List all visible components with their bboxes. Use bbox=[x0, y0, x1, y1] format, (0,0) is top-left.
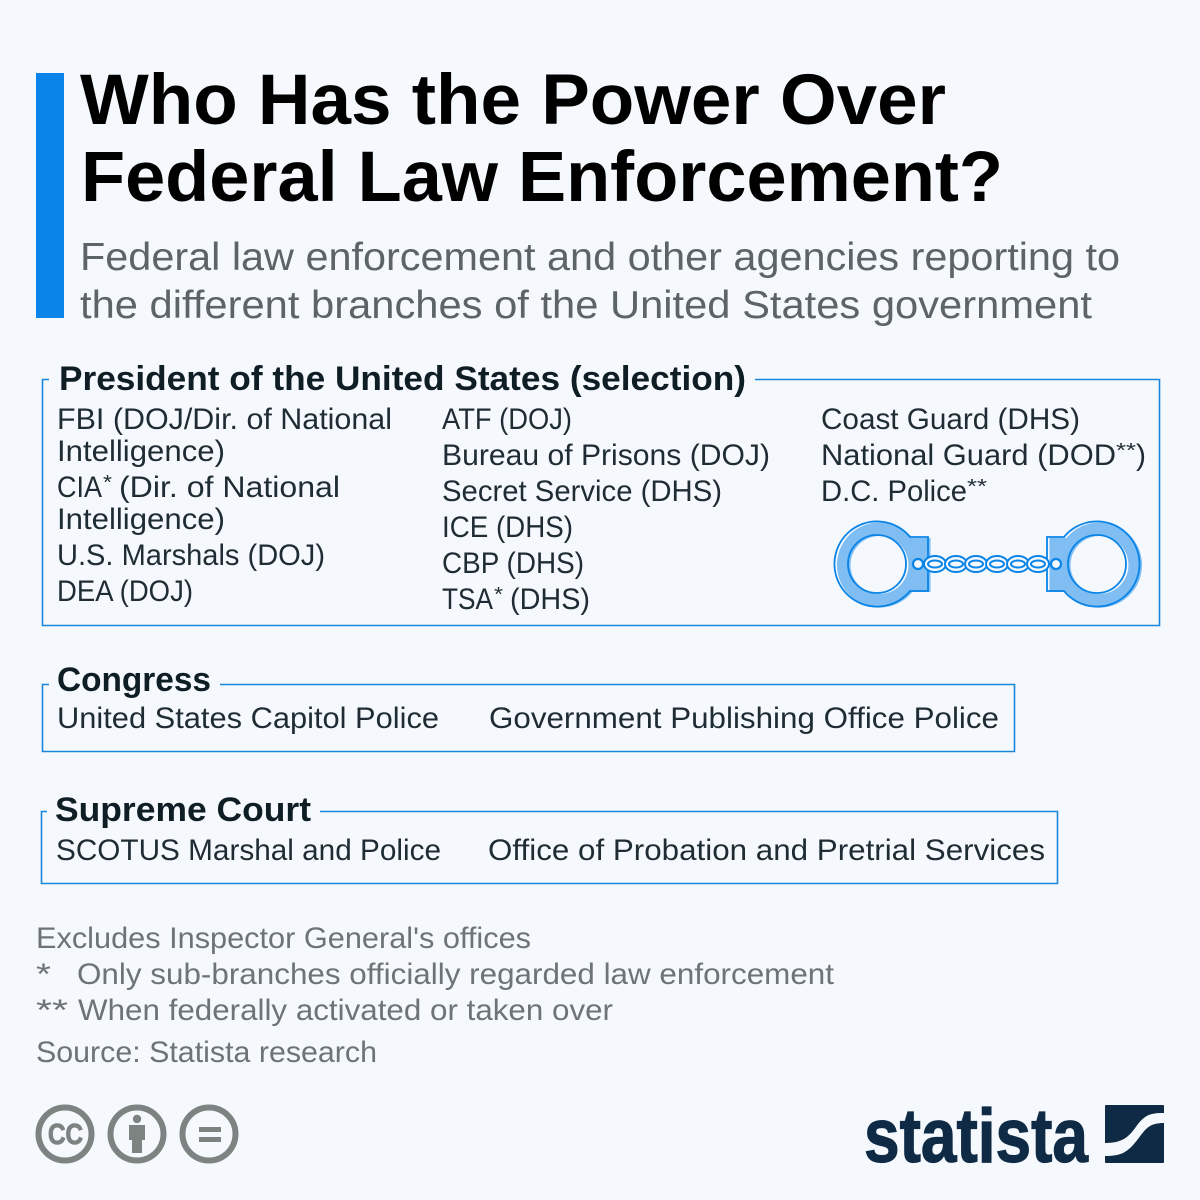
column 3 agencies: ) bbox=[1136, 439, 1146, 472]
column 2 agencies: Bureau of Prisons (DOJ) bbox=[442, 439, 770, 472]
title: Who Has the Power Over bbox=[80, 61, 946, 140]
column 3 agencies: Coast Guard (DHS) bbox=[821, 403, 1080, 436]
subtitle: Federal law enforcement and other agencies reporting to bbox=[80, 236, 1120, 279]
footnotes: Only sub-branches officially regarded law enforcement bbox=[77, 958, 835, 991]
footnotes: * bbox=[36, 958, 51, 991]
agency: SCOTUS Marshal: SCOTUS Marshal and Police bbox=[56, 834, 441, 867]
icon: handcuffs bbox=[834, 521, 1142, 608]
accent bar bbox=[36, 73, 64, 318]
subtitle: the different branches of the United States government bbox=[80, 284, 1092, 327]
column 2 agencies: * bbox=[494, 584, 503, 606]
footnotes: Excludes Inspector General's offices bbox=[36, 922, 531, 955]
title: Federal Law Enforcement? bbox=[81, 138, 1003, 217]
subtitle bbox=[80, 236, 1120, 327]
column 1 agencies: * bbox=[103, 472, 112, 494]
column 2 agencies: ICE (DHS) bbox=[442, 511, 573, 544]
panel: Congress bbox=[42, 661, 1014, 752]
column 1 agencies: U.S. Marshals (DOJ) bbox=[57, 539, 325, 572]
column 1 agencies: FBI (DOJ/Dir. of National bbox=[57, 403, 392, 436]
title bbox=[80, 61, 1003, 217]
agency: Probation: Office of Probation and Pretrial Services bbox=[488, 834, 1045, 867]
panel: Supreme Court bbox=[42, 791, 1058, 884]
column 2 agencies: CBP (DHS) bbox=[442, 547, 584, 580]
icon: creative commons: CC bbox=[48, 1119, 83, 1151]
heading: President: President of the United States (selection) bbox=[59, 360, 746, 398]
column 1 agencies: CIA bbox=[57, 471, 102, 504]
footnotes: When federally activated or taken over bbox=[78, 994, 613, 1027]
column 2 agencies: (DHS) bbox=[510, 583, 590, 616]
column 1 agencies: DEA (DOJ) bbox=[57, 575, 193, 608]
column 2 agencies: ATF (DOJ) bbox=[442, 403, 572, 436]
icon: no derivatives bbox=[182, 1108, 236, 1160]
column 2 agencies: Secret Service (DHS) bbox=[442, 475, 722, 508]
column 3 agencies: National Guard (DOD bbox=[821, 439, 1116, 472]
icon: statista mark bbox=[1105, 1105, 1164, 1163]
column 1 agencies: (Dir. of National bbox=[119, 471, 340, 504]
column 3 agencies: ** bbox=[967, 476, 987, 498]
panel: President of the United States bbox=[42, 360, 1160, 626]
column 3 agencies: ** bbox=[1116, 440, 1136, 462]
column 1 agencies: Intelligence) bbox=[57, 503, 225, 536]
icon: attribution bbox=[110, 1108, 164, 1160]
heading: Supreme Court: Supreme Court bbox=[55, 791, 311, 829]
column 1 agencies: Intelligence) bbox=[57, 435, 225, 468]
column 3 agencies: D.C. Police bbox=[821, 475, 967, 508]
column 1 agencies bbox=[57, 403, 392, 608]
column 2 agencies: TSA bbox=[442, 583, 493, 616]
agency: Capitol Police: United States Capitol Police bbox=[57, 702, 439, 735]
footnotes bbox=[36, 922, 835, 1069]
icon: creative commons bbox=[38, 1108, 92, 1160]
column 2 agencies bbox=[442, 403, 770, 616]
agency: GPO Police: Government Publishing Office Police bbox=[489, 702, 999, 735]
column 3 agencies bbox=[821, 403, 1146, 508]
footnotes: ** bbox=[36, 994, 68, 1027]
heading: Congress: Congress bbox=[57, 661, 211, 699]
statista logo: statista bbox=[864, 1094, 1089, 1179]
footnotes: Source: Statista research bbox=[36, 1036, 377, 1069]
